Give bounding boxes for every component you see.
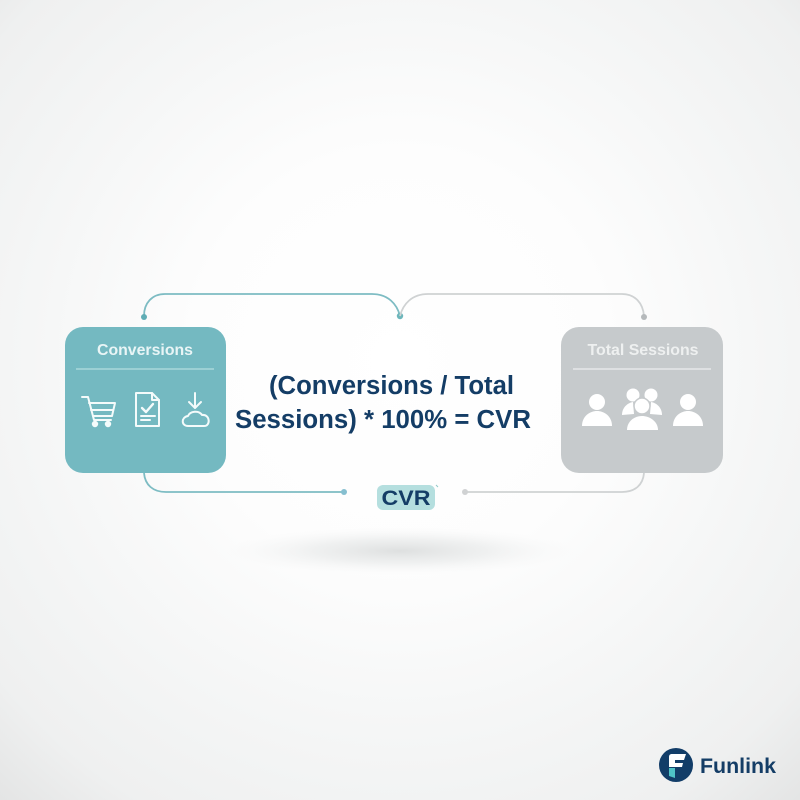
top connector: teal [141,294,403,320]
icon: group of people [622,388,662,430]
icon: document with check [136,393,159,426]
logo: Funlink [659,748,776,782]
icon: person left [582,394,612,426]
CVR badge [377,485,438,510]
panel: total sessions [561,327,723,473]
formula text [235,372,531,434]
CVR badge: CVR [382,487,430,510]
icon: cloud download [183,393,209,426]
icon: person right [673,394,703,426]
floor shadow [225,527,575,575]
formula text: (Conversions / Total [269,372,514,400]
heading: total sessions: Total Sessions [588,342,699,359]
panel: conversions [65,327,226,473]
top connector: grey [400,294,647,320]
bottom connector: grey [462,473,644,495]
formula text: Sessions) * 100% = CVR [235,406,531,434]
icon: shopping cart [82,397,115,426]
bottom connector: teal [144,473,347,495]
logo: Funlink: Funlink [700,755,776,778]
heading: conversions: Conversions [97,342,193,359]
